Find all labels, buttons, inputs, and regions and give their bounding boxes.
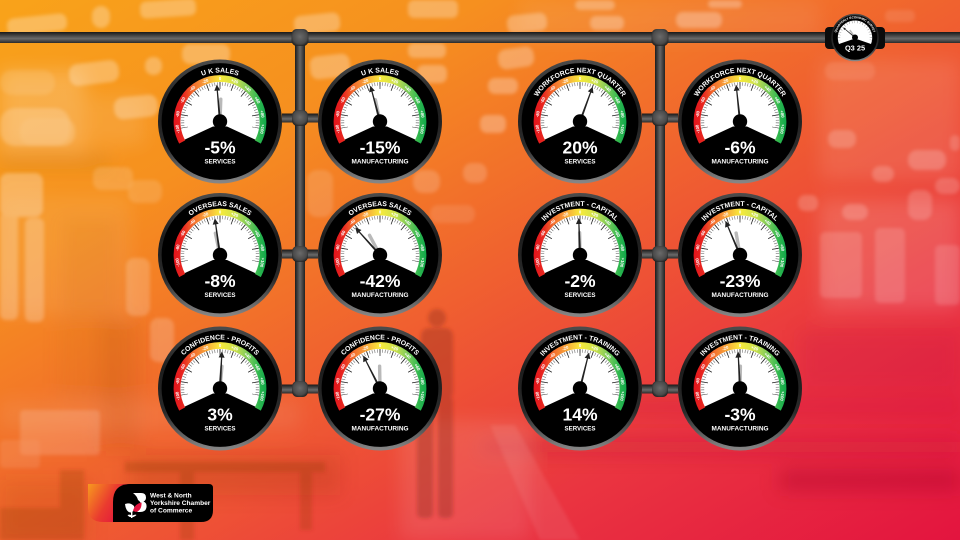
gauge: workforce next quarter services: SERVICES bbox=[564, 160, 596, 166]
gauge: investment training manufacturing: -3% bbox=[724, 404, 756, 424]
gauge: confidence profits manufacturing: MANUFACTURING bbox=[352, 426, 409, 432]
gauge: investment capital services: INVESTMENT - CAPITAL bbox=[541, 201, 617, 222]
pipework bbox=[0, 29, 960, 397]
gauge: confidence profits services bbox=[158, 326, 282, 450]
logo wordmark: of Commerce bbox=[150, 508, 192, 514]
gauge: investment capital manufacturing: MANUFACTURING bbox=[712, 293, 769, 299]
gauge: investment training manufacturing bbox=[678, 326, 802, 450]
gauge: UK sales services: -5% bbox=[204, 138, 236, 158]
logo: West and North Yorkshire Chamber of Commerce bbox=[88, 484, 213, 522]
gauge: UK sales manufacturing: U K SALES bbox=[360, 68, 399, 76]
gauge: overseas sales services: SERVICES bbox=[204, 293, 236, 299]
gauge: investment training services: INVESTMENT - TRAINING bbox=[540, 334, 620, 356]
badge: mini Q3 25 gauge on the pipe: QUARTERLY ECONOMIC SURVEY bbox=[834, 16, 876, 32]
gauge: workforce next quarter manufacturing bbox=[678, 60, 802, 184]
gauge: overseas sales services: OVERSEAS SALES bbox=[188, 201, 252, 216]
gauge: investment capital services: -2% bbox=[564, 271, 596, 291]
gauge: overseas sales services: -8% bbox=[204, 271, 236, 291]
gauge: workforce next quarter manufacturing: -6% bbox=[724, 138, 756, 158]
gauge: investment training manufacturing: MANUFACTURING bbox=[712, 426, 769, 432]
logo wordmark: Yorkshire Chamber bbox=[150, 500, 211, 507]
gauge: workforce next quarter manufacturing: MANUFACTURING bbox=[712, 160, 769, 166]
gauge: UK sales services: SERVICES bbox=[204, 160, 236, 166]
gauge: confidence profits manufacturing: CONFIDENCE - PROFITS bbox=[341, 334, 419, 355]
gauge: overseas sales manufacturing bbox=[318, 193, 442, 317]
gauge: investment training services: SERVICES bbox=[564, 426, 596, 432]
gauge: UK sales manufacturing: MANUFACTURING bbox=[352, 160, 409, 166]
gauge: investment capital services: SERVICES bbox=[564, 293, 596, 299]
gauge: investment training services bbox=[518, 326, 642, 450]
gauge: UK sales services bbox=[158, 60, 282, 184]
gauge: UK sales services: U K SALES bbox=[200, 68, 239, 76]
gauge: investment capital manufacturing: INVESTMENT - CAPITAL bbox=[701, 201, 777, 222]
logo wordmark: West & North bbox=[150, 492, 192, 500]
gauge: investment training services: 14% bbox=[562, 404, 598, 424]
gauge: investment capital manufacturing: -23% bbox=[720, 271, 761, 291]
badge: mini Q3 25 gauge on the pipe bbox=[825, 14, 885, 62]
icon: chamber rose emblem bbox=[125, 493, 147, 518]
gauge: overseas sales manufacturing: OVERSEAS SALES bbox=[348, 201, 412, 216]
gauge: confidence profits services: SERVICES bbox=[204, 426, 236, 432]
gauge: investment capital manufacturing bbox=[678, 193, 802, 317]
gauge: overseas sales services bbox=[158, 193, 282, 317]
gauge: workforce next quarter manufacturing: WORKFORCE NEXT QUARTER bbox=[694, 68, 786, 97]
blurred worker silhouette bbox=[417, 309, 453, 518]
gauge: overseas sales manufacturing: MANUFACTURING bbox=[352, 293, 409, 299]
badge: mini Q3 25 gauge on the pipe: Q3 25 bbox=[845, 44, 865, 53]
gauge: workforce next quarter services bbox=[518, 60, 642, 184]
gauge: workforce next quarter services: 20% bbox=[562, 138, 598, 158]
gauge: confidence profits services: 3% bbox=[207, 404, 233, 424]
gauge: UK sales manufacturing bbox=[318, 60, 442, 184]
gauge: confidence profits manufacturing: -27% bbox=[360, 404, 401, 424]
gauge: workforce next quarter services: WORKFORCE NEXT QUARTER bbox=[534, 68, 626, 97]
gauge: confidence profits services: CONFIDENCE - PROFITS bbox=[181, 334, 259, 355]
gauge: confidence profits manufacturing bbox=[318, 326, 442, 450]
gauge: UK sales manufacturing: -15% bbox=[360, 138, 401, 158]
gauge: investment training manufacturing: INVESTMENT - TRAINING bbox=[700, 334, 780, 356]
gauge: investment capital services bbox=[518, 193, 642, 317]
gauge: overseas sales manufacturing: -42% bbox=[360, 271, 401, 291]
